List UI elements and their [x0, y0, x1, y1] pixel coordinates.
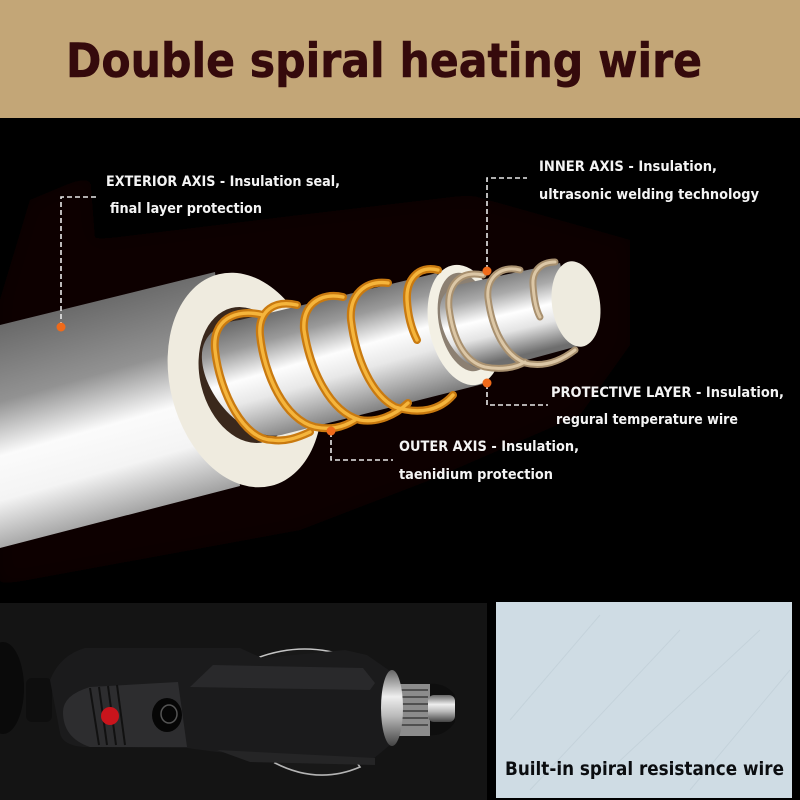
inner core	[440, 258, 606, 370]
LED panel	[63, 682, 187, 747]
callout: outer axis: OUTER AXIS - Insulation,	[399, 439, 579, 455]
red LED	[101, 707, 119, 725]
callout: protective layer: regural temperature wire	[556, 412, 738, 428]
panel: cable cross-section diagram	[0, 159, 784, 585]
callout: inner axis: INNER AXIS - Insulation,	[539, 159, 717, 175]
contact blades	[257, 649, 360, 775]
background glow	[0, 175, 630, 585]
tan spiral wire	[449, 262, 575, 368]
lower rail	[217, 750, 375, 765]
callout: protective layer: PROTECTIVE LAYER - Insulation,	[551, 385, 784, 401]
panel: resistance wire fabric	[496, 602, 792, 798]
panel: car plug photo	[0, 603, 487, 800]
callout: exterior axis: EXTERIOR AXIS - Insulation seal,	[106, 174, 340, 190]
title: Double spiral heating wire	[66, 34, 702, 89]
metal collar and tip	[381, 670, 455, 746]
callout: exterior axis	[56, 174, 340, 332]
plug body	[50, 648, 393, 764]
callout: outer axis: taenidium protection	[399, 467, 553, 483]
orange spiral heating wire	[215, 269, 453, 441]
middle tube	[202, 273, 483, 436]
title banner	[0, 0, 800, 118]
inner insulation ring	[417, 258, 513, 392]
cord	[0, 642, 52, 734]
screw	[152, 698, 182, 732]
callout: protective layer	[482, 378, 784, 428]
callout: inner axis: ultrasonic welding technology	[539, 187, 759, 203]
callout: exterior axis: final layer protection	[110, 201, 262, 217]
callout: inner axis	[482, 159, 759, 276]
callout: outer axis	[326, 426, 579, 483]
top rail	[190, 665, 375, 690]
outer tube with insulation ring	[0, 256, 344, 548]
